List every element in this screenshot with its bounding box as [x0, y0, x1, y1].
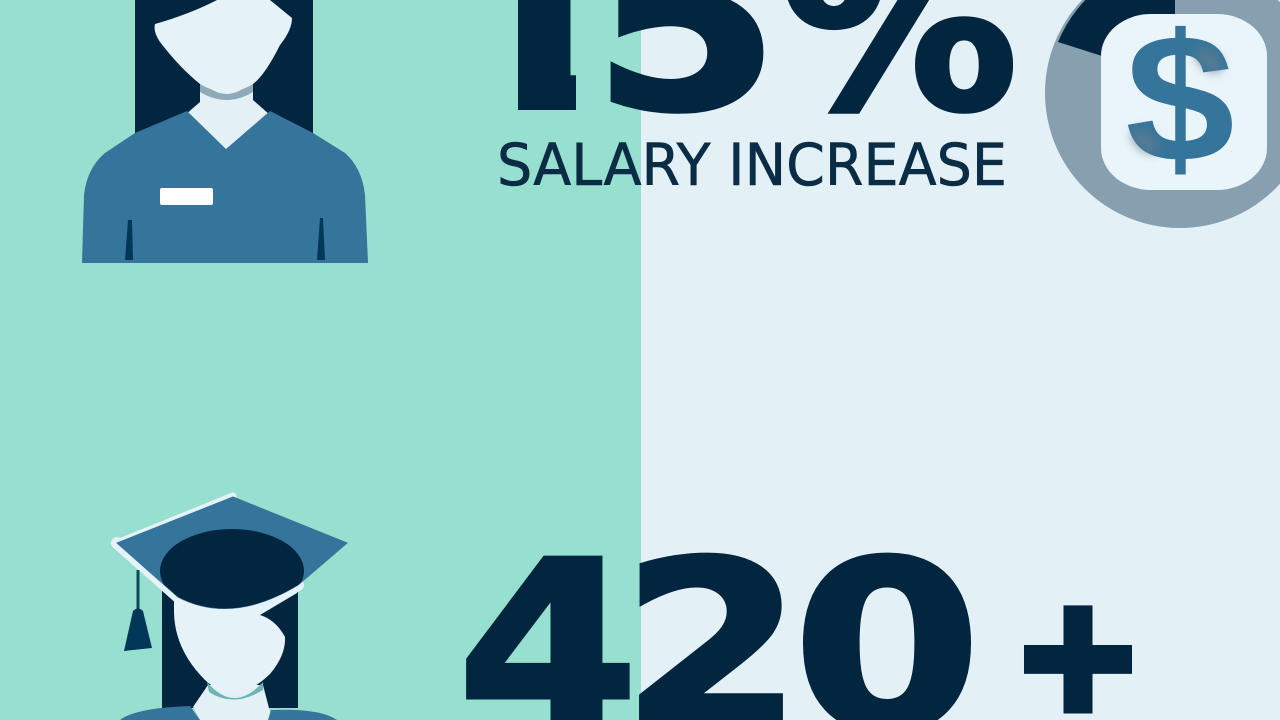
icon: graduate figure: [117, 496, 347, 720]
icon: nurse figure: [82, 0, 368, 263]
panel: light right background: [641, 0, 1280, 720]
label: salary increase: SALARY INCREASE: [497, 131, 1007, 199]
panel: teal left background: [0, 0, 641, 720]
icon: dollar progress ring: [1058, 0, 1280, 200]
icon: dollar progress ring: $: [1125, 0, 1235, 200]
big number: 420+: [466, 552, 1132, 720]
big number: 15%: [518, 0, 1014, 114]
